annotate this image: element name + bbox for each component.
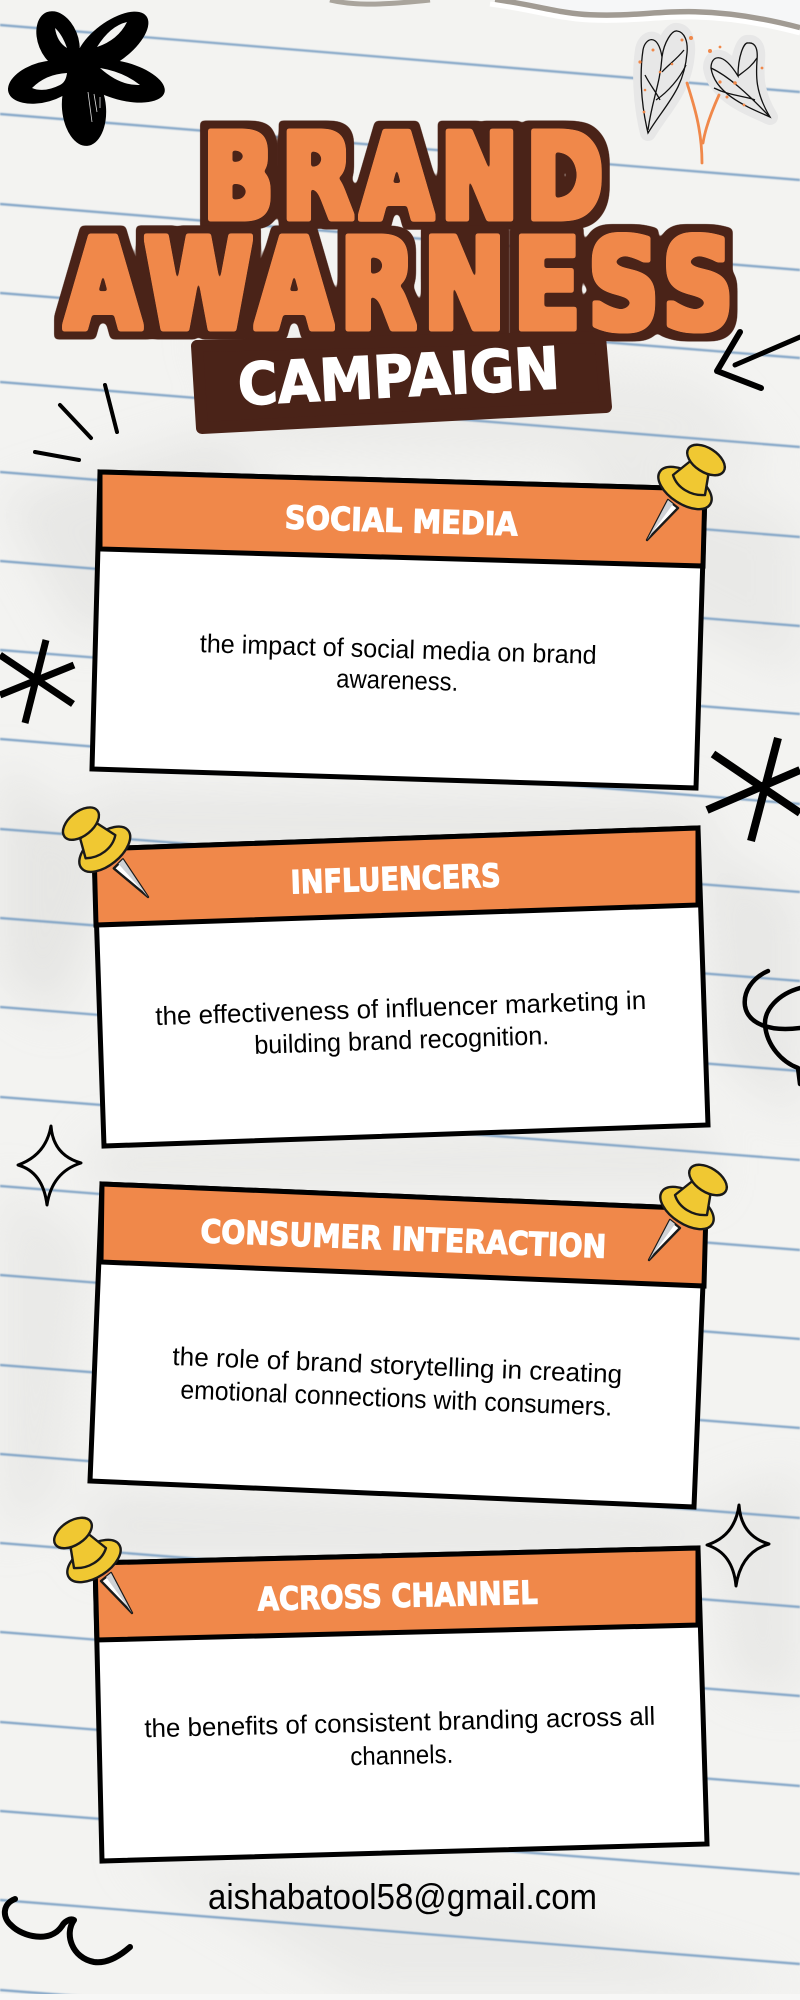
subtitle banner: CAMPAIGN bbox=[236, 334, 561, 419]
panel: consumer interaction bbox=[90, 1184, 706, 1507]
panel: social media: SOCIAL MEDIA bbox=[284, 499, 519, 543]
panel: social media: the impact of social media on brand bbox=[199, 628, 597, 670]
panel: across channel bbox=[95, 1548, 707, 1861]
panel: across channel: channels. bbox=[350, 1739, 454, 1771]
panel: influencers: INFLUENCERS bbox=[290, 857, 501, 901]
icon: pin on consumer interaction bbox=[649, 1158, 732, 1260]
icon: hand-drawn arrow bbox=[717, 332, 800, 388]
panel: social media bbox=[92, 472, 705, 788]
icon: right sparkle bbox=[707, 1505, 769, 1586]
panel: influencers: building brand recognition. bbox=[254, 1020, 550, 1060]
icon: bottom-left squiggle bbox=[5, 1899, 130, 1962]
title: BRAND: BRAND bbox=[203, 108, 611, 246]
icon: pin on across channel bbox=[49, 1511, 132, 1613]
icon: spiral doodle bbox=[745, 971, 800, 1084]
panel: consumer interaction: emotional connections with consumers. bbox=[180, 1374, 613, 1422]
icon: left sparkle bbox=[18, 1126, 81, 1205]
panel: influencers bbox=[94, 828, 708, 1146]
panel: across channel: the benefits of consistent branding across all bbox=[144, 1701, 656, 1743]
icon: left asterisk bbox=[0, 640, 74, 723]
panel: influencers: the effectiveness of influencer marketing in bbox=[155, 985, 647, 1031]
contact email: aishabatool58@gmail.com bbox=[208, 1876, 597, 1917]
icon: black flower doodle bbox=[3, 0, 169, 148]
icon: pin on social media bbox=[647, 438, 730, 540]
panel: across channel: ACROSS CHANNEL bbox=[257, 1574, 538, 1618]
panel: consumer interaction: the role of brand storytelling in creating bbox=[172, 1341, 623, 1389]
panel: social media: awareness. bbox=[336, 663, 459, 697]
icon: right asterisk bbox=[707, 738, 800, 841]
icon: pin on influencers bbox=[55, 796, 148, 906]
panel: consumer interaction: CONSUMER INTERACTION bbox=[200, 1212, 607, 1266]
icon: burst marks bbox=[35, 385, 117, 460]
icon: two doodle leaves bbox=[638, 31, 770, 163]
